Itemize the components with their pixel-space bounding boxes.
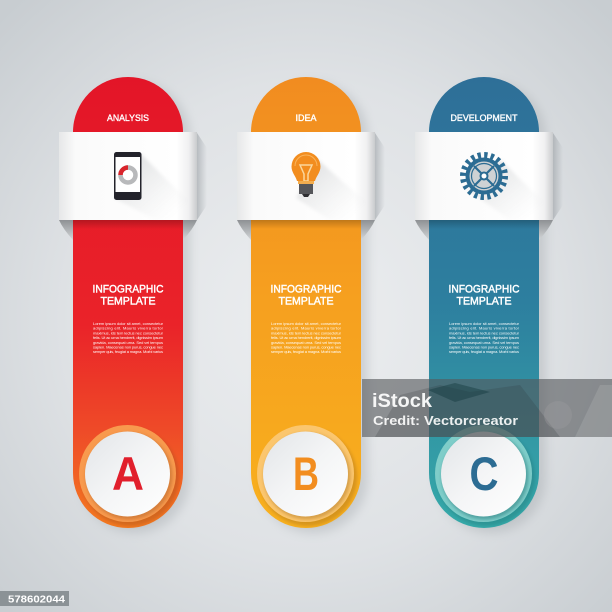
heading: infographic template: INFOGRAPHIC xyxy=(92,284,164,296)
body text: Lorem ipsum dolor sit amet, consectetur xyxy=(271,321,342,326)
watermark text: credit: Credit: Vectorcreator xyxy=(373,413,518,428)
strip: orange xyxy=(251,77,361,528)
white band xyxy=(59,132,197,220)
heading: infographic template: INFOGRAPHIC xyxy=(448,284,520,296)
body text: adipiscing elit. Mauris viverra tortor xyxy=(93,326,164,331)
column C: development: TEMPLATE xyxy=(456,296,512,308)
right fold xyxy=(361,220,375,240)
band shadow xyxy=(197,133,207,220)
image id tag: 578602044 xyxy=(8,594,65,606)
body text: maximus, ids tem lectus nec consectetur xyxy=(93,330,164,335)
icon shadow xyxy=(296,158,370,220)
body text: semper quis, feugiat a magna. Morbi varius xyxy=(449,349,519,354)
watermark banner xyxy=(362,379,612,437)
body text xyxy=(93,321,164,354)
body text: sapien. Maecenas non purus, congue nec xyxy=(271,344,341,350)
badge A: A xyxy=(112,447,144,500)
left fold xyxy=(237,220,251,240)
body text: adipiscing elit. Mauris viverra tortor xyxy=(271,326,342,331)
body text: semper quis, feugiat a magna. Morbi varius xyxy=(93,349,163,354)
body text: Lorem ipsum dolor sit amet, consectetur xyxy=(449,321,520,326)
body text xyxy=(449,321,520,354)
body text: felis. Ut ac urna hendrerit, dignissim ipsum xyxy=(271,335,342,340)
watermark text: iStock: iStock xyxy=(372,391,432,412)
right fold xyxy=(539,220,553,240)
icon: gear xyxy=(463,155,505,197)
white band xyxy=(237,132,375,220)
column B: idea xyxy=(237,77,385,533)
strip: red xyxy=(73,77,183,528)
body text: semper quis, feugiat a magna. Morbi varius xyxy=(271,349,341,354)
column C: development xyxy=(415,77,563,533)
white band xyxy=(415,132,553,220)
heading: infographic template: INFOGRAPHIC xyxy=(270,284,342,296)
body text xyxy=(271,321,342,354)
image id tag xyxy=(0,591,69,606)
body text: sapien. Maecenas non purus, congue nec xyxy=(93,344,163,350)
heading: idea: IDEA xyxy=(296,113,316,123)
badge B: B xyxy=(293,447,319,500)
body text: sapien. Maecenas non purus, congue nec xyxy=(449,344,519,350)
badge C xyxy=(435,425,535,526)
body text: maximus, ids tem lectus nec consectetur xyxy=(271,330,342,335)
body text: adipiscing elit. Mauris viverra tortor xyxy=(449,326,520,331)
column A: analysis: TEMPLATE xyxy=(100,296,156,308)
icon shadow xyxy=(114,154,192,220)
column A: analysis xyxy=(59,77,207,533)
body text: Lorem ipsum dolor sit amet, consectetur xyxy=(93,321,164,326)
strip: blue xyxy=(429,77,539,528)
column B: idea: TEMPLATE xyxy=(278,296,334,308)
icon: light bulb xyxy=(292,152,320,197)
icon shadow xyxy=(468,160,548,220)
body text: maximus, ids tem lectus nec consectetur xyxy=(449,330,520,335)
heading: development: DEVELOPMENT xyxy=(450,113,518,123)
body text: gravida, consequat urna. Sed vel tempus xyxy=(93,340,163,345)
heading: analysis: ANALYSIS xyxy=(107,113,149,123)
body text: felis. Ut ac urna hendrerit, dignissim ipsum xyxy=(93,335,164,340)
right fold xyxy=(183,220,197,240)
left fold xyxy=(59,220,73,240)
body text: gravida, consequat urna. Sed vel tempus xyxy=(449,340,519,345)
left fold xyxy=(415,220,429,240)
band shadow xyxy=(553,133,563,220)
body text: felis. Ut ac urna hendrerit, dignissim ipsum xyxy=(449,335,520,340)
badge B xyxy=(257,425,357,526)
body text: gravida, consequat urna. Sed vel tempus xyxy=(271,340,341,345)
badge A xyxy=(79,425,179,526)
icon: phone xyxy=(114,152,142,200)
badge C: C xyxy=(470,447,498,500)
band shadow xyxy=(375,133,385,220)
